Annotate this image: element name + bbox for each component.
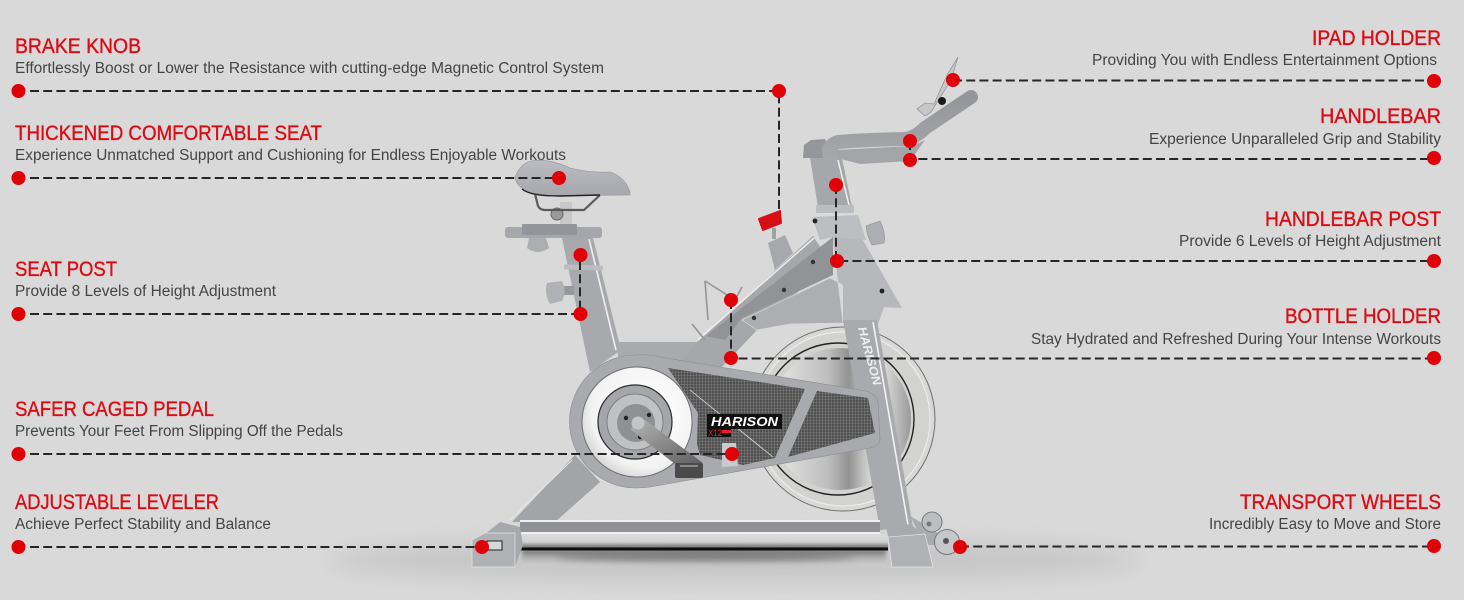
- callout: ipad holder: Providing You with Endless Entertainment Options: [1092, 52, 1437, 69]
- brake base: [768, 235, 793, 270]
- transport wheels: [910, 512, 960, 554]
- callout: adjustable leveler: [12, 491, 489, 554]
- pedal bracket: [722, 443, 738, 467]
- rear horizontal frame: [615, 342, 712, 364]
- callout: handlebar post: [829, 178, 1442, 268]
- pedal: [675, 463, 703, 478]
- seat: [515, 160, 630, 196]
- main diagonal frame: [683, 236, 833, 367]
- flywheel: [751, 327, 935, 511]
- ground shadow: [325, 534, 1145, 580]
- handlebar post: [810, 158, 854, 213]
- callout: bottle holder: [724, 293, 1441, 365]
- callout: safer caged pedal: Prevents Your Feet From Slipping Off the Pedals: [15, 423, 343, 440]
- brake knob: [759, 211, 781, 230]
- brand logo: [707, 414, 782, 438]
- left foot: [472, 522, 523, 567]
- mesh panels: [668, 368, 875, 465]
- callout: transport wheels: Incredibly Easy to Move and Store: [1209, 516, 1441, 533]
- callout: safer caged pedal: [12, 398, 739, 461]
- brand logo: HARISON: [711, 414, 779, 429]
- strut brand: HARISON: [855, 325, 884, 387]
- exercise bike illustration: [472, 57, 971, 567]
- base bar: [520, 520, 880, 534]
- callout: seat post: [12, 248, 588, 321]
- ipad holder: [917, 57, 958, 116]
- chain guard: [570, 355, 880, 488]
- flywheel upright strut: [843, 320, 913, 530]
- callout: handlebar: [903, 105, 1441, 167]
- callout: thickened comfortable seat: [12, 122, 566, 185]
- callout: safer caged pedal: SAFER CAGED PEDAL: [15, 398, 214, 421]
- seat post: [546, 238, 621, 372]
- callout: handlebar post: HANDLEBAR POST: [1265, 208, 1441, 231]
- handlebar: [803, 97, 971, 164]
- seat post knob: [546, 281, 574, 304]
- callout: brake knob: Effortlessly Boost or Lower the Resistance with cutting-edge Magnetic Control System: [15, 60, 604, 77]
- callout: handlebar: Experience Unparalleled Grip and Stability: [1149, 131, 1441, 148]
- callout: thickened comfortable seat: THICKENED COMFORTABLE SEAT: [15, 122, 322, 145]
- rear leg: [512, 455, 600, 522]
- right foot: [886, 524, 933, 567]
- brand logo: X12: [708, 428, 722, 438]
- callout: adjustable leveler: Achieve Perfect Stability and Balance: [15, 516, 271, 533]
- white crank disc: [582, 367, 692, 477]
- callout: transport wheels: [953, 491, 1441, 554]
- callout: transport wheels: TRANSPORT WHEELS: [1240, 491, 1441, 514]
- callout: thickened comfortable seat: Experience Unmatched Support and Cushioning for Endless Enjoyable Workouts: [15, 147, 566, 164]
- callout: ipad holder: IPAD HOLDER: [1312, 27, 1441, 50]
- callout: brake knob: [12, 35, 786, 212]
- callout: brake knob: BRAKE KNOB: [15, 35, 141, 58]
- callout: seat post: Provide 8 Levels of Height Adjustment: [15, 283, 277, 300]
- callout: ipad holder: [946, 27, 1441, 88]
- callout: bottle holder: Stay Hydrated and Refreshed During Your Intense Workouts: [1031, 331, 1441, 348]
- callout: handlebar: HANDLEBAR: [1320, 105, 1441, 128]
- bottle holder: [692, 281, 742, 340]
- seat rails: [535, 194, 600, 210]
- callout: seat post: SEAT POST: [15, 258, 117, 281]
- frame gusset: [742, 215, 902, 330]
- callout: bottle holder: BOTTLE HOLDER: [1285, 305, 1441, 328]
- callout: adjustable leveler: ADJUSTABLE LEVELER: [15, 491, 219, 514]
- handlebar knob: [866, 221, 884, 245]
- callout: handlebar post: Provide 6 Levels of Height Adjustment: [1179, 233, 1442, 250]
- seat clamp and bar: [505, 202, 602, 252]
- crank arm: [631, 418, 703, 464]
